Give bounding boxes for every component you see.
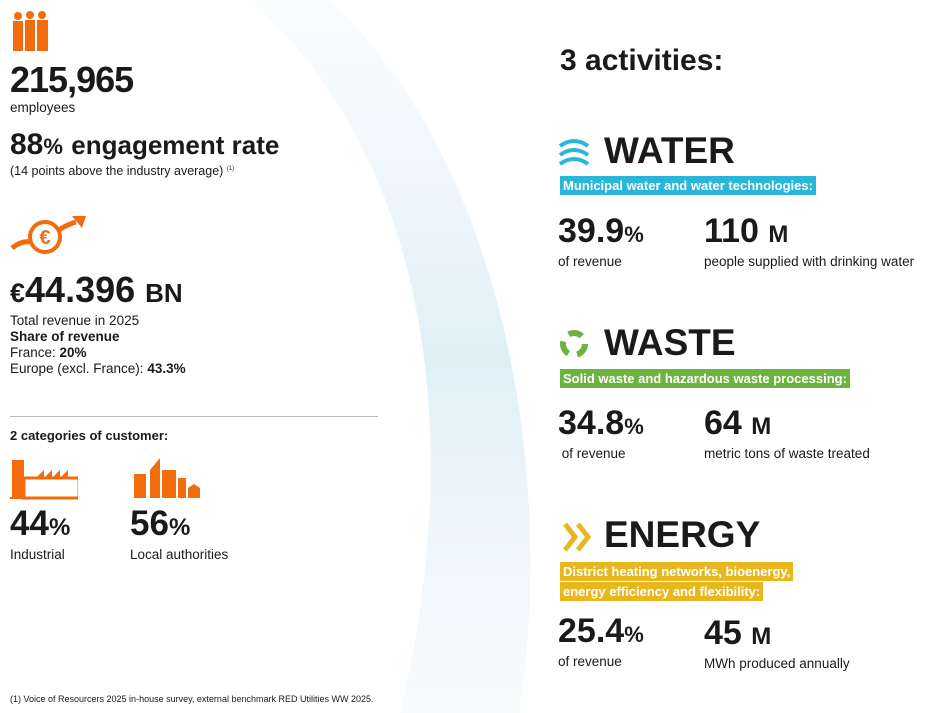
- stat: revenue: Total revenue in 2025: [10, 313, 139, 328]
- stat: 39.9%: [558, 212, 644, 250]
- panel: energy: energy efficiency and flexibility:: [563, 584, 760, 599]
- heading: customers: 2 categories of customer:: [10, 428, 168, 443]
- stat: industrial: 44%: [10, 504, 70, 543]
- stat: of revenue: [558, 254, 622, 269]
- footnote: (1) Voice of Resourcers 2025 in-house survey, external benchmark RED Utilities WW 2025.: [10, 694, 374, 704]
- panel: water: [558, 130, 914, 269]
- stat: engagement: (14 points above the industry average) (1): [10, 164, 234, 178]
- stat: 64 M: [704, 404, 771, 442]
- stat: revenue: France: 20%: [10, 345, 87, 360]
- stat: employees: employees: [10, 100, 75, 115]
- stat: engagement: [10, 128, 279, 178]
- icon: factory: [10, 460, 78, 500]
- stat: [558, 612, 644, 669]
- stat: [704, 212, 914, 269]
- panel: waste: [558, 322, 870, 461]
- stat: employees: 215,965: [10, 59, 133, 100]
- heading: activities: 3 activities:: [560, 44, 723, 77]
- panel: energy: [558, 514, 850, 671]
- stat: local authorities: [130, 504, 228, 562]
- stat: revenue: €44.396 BN: [10, 269, 183, 310]
- heading: WASTE: [604, 322, 736, 363]
- stat: local authorities: 56%: [130, 504, 190, 543]
- stat: engagement: 88% engagement rate: [10, 128, 279, 161]
- stat: revenue: [10, 269, 186, 376]
- stat: [558, 404, 644, 461]
- icon: euro growth: €: [39, 227, 51, 249]
- heading: WATER: [604, 130, 735, 171]
- icon: recycle: [560, 330, 588, 358]
- tag: District heating networks, bioenergy,: [563, 564, 790, 579]
- stat: 25.4%: [558, 612, 644, 650]
- stat: local authorities: Local authorities: [130, 547, 228, 562]
- stat: 45 M: [704, 614, 771, 652]
- tag: Municipal water and water technologies:: [563, 178, 813, 193]
- icon: euro growth: [10, 216, 86, 254]
- icon: chevrons: [563, 522, 592, 552]
- stat: [704, 614, 850, 671]
- heading: ENERGY: [604, 514, 760, 555]
- icon: city: [134, 458, 200, 498]
- stat: industrial: Industrial: [10, 547, 65, 562]
- stat: revenue: Share of revenue: [10, 329, 120, 344]
- stat: metric tons of waste treated: [704, 446, 870, 461]
- stat: of revenue: [562, 446, 626, 461]
- icon: people: [13, 11, 48, 51]
- stat: industrial: [10, 504, 70, 562]
- stat: MWh produced annually: [704, 656, 850, 671]
- stat: 34.8%: [558, 404, 644, 442]
- tag: Solid waste and hazardous waste processing:: [563, 371, 847, 386]
- stat: 110 M: [704, 212, 788, 250]
- stat: [558, 212, 644, 269]
- icon: waves: [558, 139, 590, 166]
- stat: of revenue: [558, 654, 622, 669]
- stat: revenue: Europe (excl. France): 43.3%: [10, 361, 186, 376]
- stat: [704, 404, 870, 461]
- stat: people supplied with drinking water: [704, 254, 914, 269]
